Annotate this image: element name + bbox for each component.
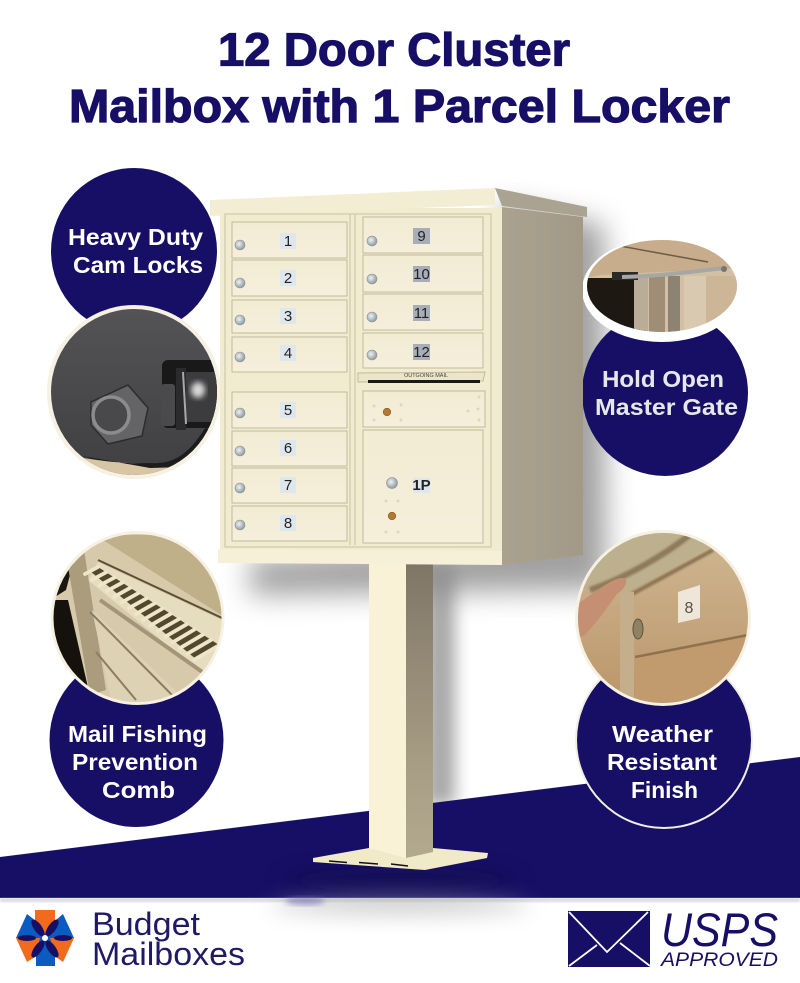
badge circle — [582, 310, 748, 476]
label: Comb — [102, 777, 175, 803]
panel: heavy duty cam locks — [47, 168, 221, 480]
label: Weather — [612, 721, 713, 747]
mailbox drop shadow — [250, 205, 606, 805]
label — [68, 721, 207, 803]
door number labels: 2 — [284, 270, 292, 287]
pedestal post — [369, 560, 433, 858]
mailbox unit — [210, 188, 587, 870]
door number labels: 7 — [284, 477, 292, 494]
ground shadow — [0, 868, 800, 915]
door frame edges — [225, 214, 491, 547]
photo ring — [47, 305, 221, 479]
logo: USPS approved — [568, 903, 778, 971]
door number labels: 8 — [284, 515, 292, 532]
label: Finish — [631, 777, 698, 803]
door number labels: 1P — [412, 477, 431, 494]
right doors — [363, 217, 485, 543]
cabinet front — [220, 208, 502, 553]
icon: envelope — [568, 911, 650, 967]
door number labels: 4 — [284, 345, 292, 362]
wordmark: Budget — [92, 906, 200, 942]
badge circle — [50, 653, 224, 827]
photo ring — [582, 238, 742, 342]
cabinet side — [502, 207, 583, 565]
door number labels: 11 — [414, 305, 429, 322]
icon: pinwheel mark — [16, 910, 74, 966]
title: 12 Door Cluster — [218, 24, 570, 76]
label: Heavy Duty — [68, 224, 203, 250]
photo: cam lock — [50, 305, 220, 480]
title: Mailbox with 1 Parcel Locker — [69, 80, 730, 132]
panel: hold open master gate — [582, 238, 748, 476]
badge circle — [51, 168, 217, 334]
door number labels: 9 — [417, 228, 426, 245]
wordmark: USPS — [661, 903, 778, 956]
outgoing mail slot — [358, 372, 485, 383]
photo: master gate — [585, 238, 740, 334]
label — [595, 366, 738, 420]
badge ring — [575, 651, 753, 829]
door number labels: 5 — [284, 402, 292, 419]
door number labels: 12 — [413, 344, 430, 361]
panel: mail fishing prevention comb — [50, 530, 226, 827]
label: Resistant — [607, 749, 717, 775]
label: Prevention — [72, 749, 198, 775]
cabinet top side — [495, 188, 587, 217]
base plate — [313, 848, 488, 870]
navy ground band — [0, 757, 800, 898]
cabinet top cap — [210, 188, 495, 216]
door number labels: 1 — [284, 233, 292, 250]
photo: finish: 8 — [685, 600, 694, 617]
badge circle — [577, 653, 751, 827]
door locks — [235, 236, 398, 530]
door number labels — [280, 228, 431, 532]
photo: finish — [578, 533, 748, 703]
outgoing mail slot: OUTGOING MAIL — [404, 373, 448, 379]
label: Cam Locks — [73, 252, 203, 278]
label — [607, 721, 717, 803]
label: Master Gate — [595, 394, 738, 420]
label — [68, 224, 203, 278]
wordmark: Mailboxes — [92, 936, 245, 972]
title — [69, 24, 730, 132]
left doors — [232, 222, 347, 541]
photo ring — [50, 531, 224, 705]
label: Mail Fishing — [68, 721, 207, 747]
logo: Budget Mailboxes — [16, 906, 245, 972]
door number labels: 10 — [413, 266, 430, 283]
door number labels: 3 — [284, 308, 292, 325]
photo: comb — [50, 530, 226, 706]
panel rivets — [372, 396, 480, 534]
door number labels: 6 — [284, 440, 292, 457]
panel: weather resistant finish — [575, 530, 755, 829]
brass locks — [383, 408, 396, 520]
cabinet base — [218, 549, 502, 565]
wordmark — [92, 906, 245, 972]
photo ring — [575, 530, 751, 706]
wordmark: APPROVED — [660, 950, 778, 971]
label: Hold Open — [602, 366, 724, 392]
